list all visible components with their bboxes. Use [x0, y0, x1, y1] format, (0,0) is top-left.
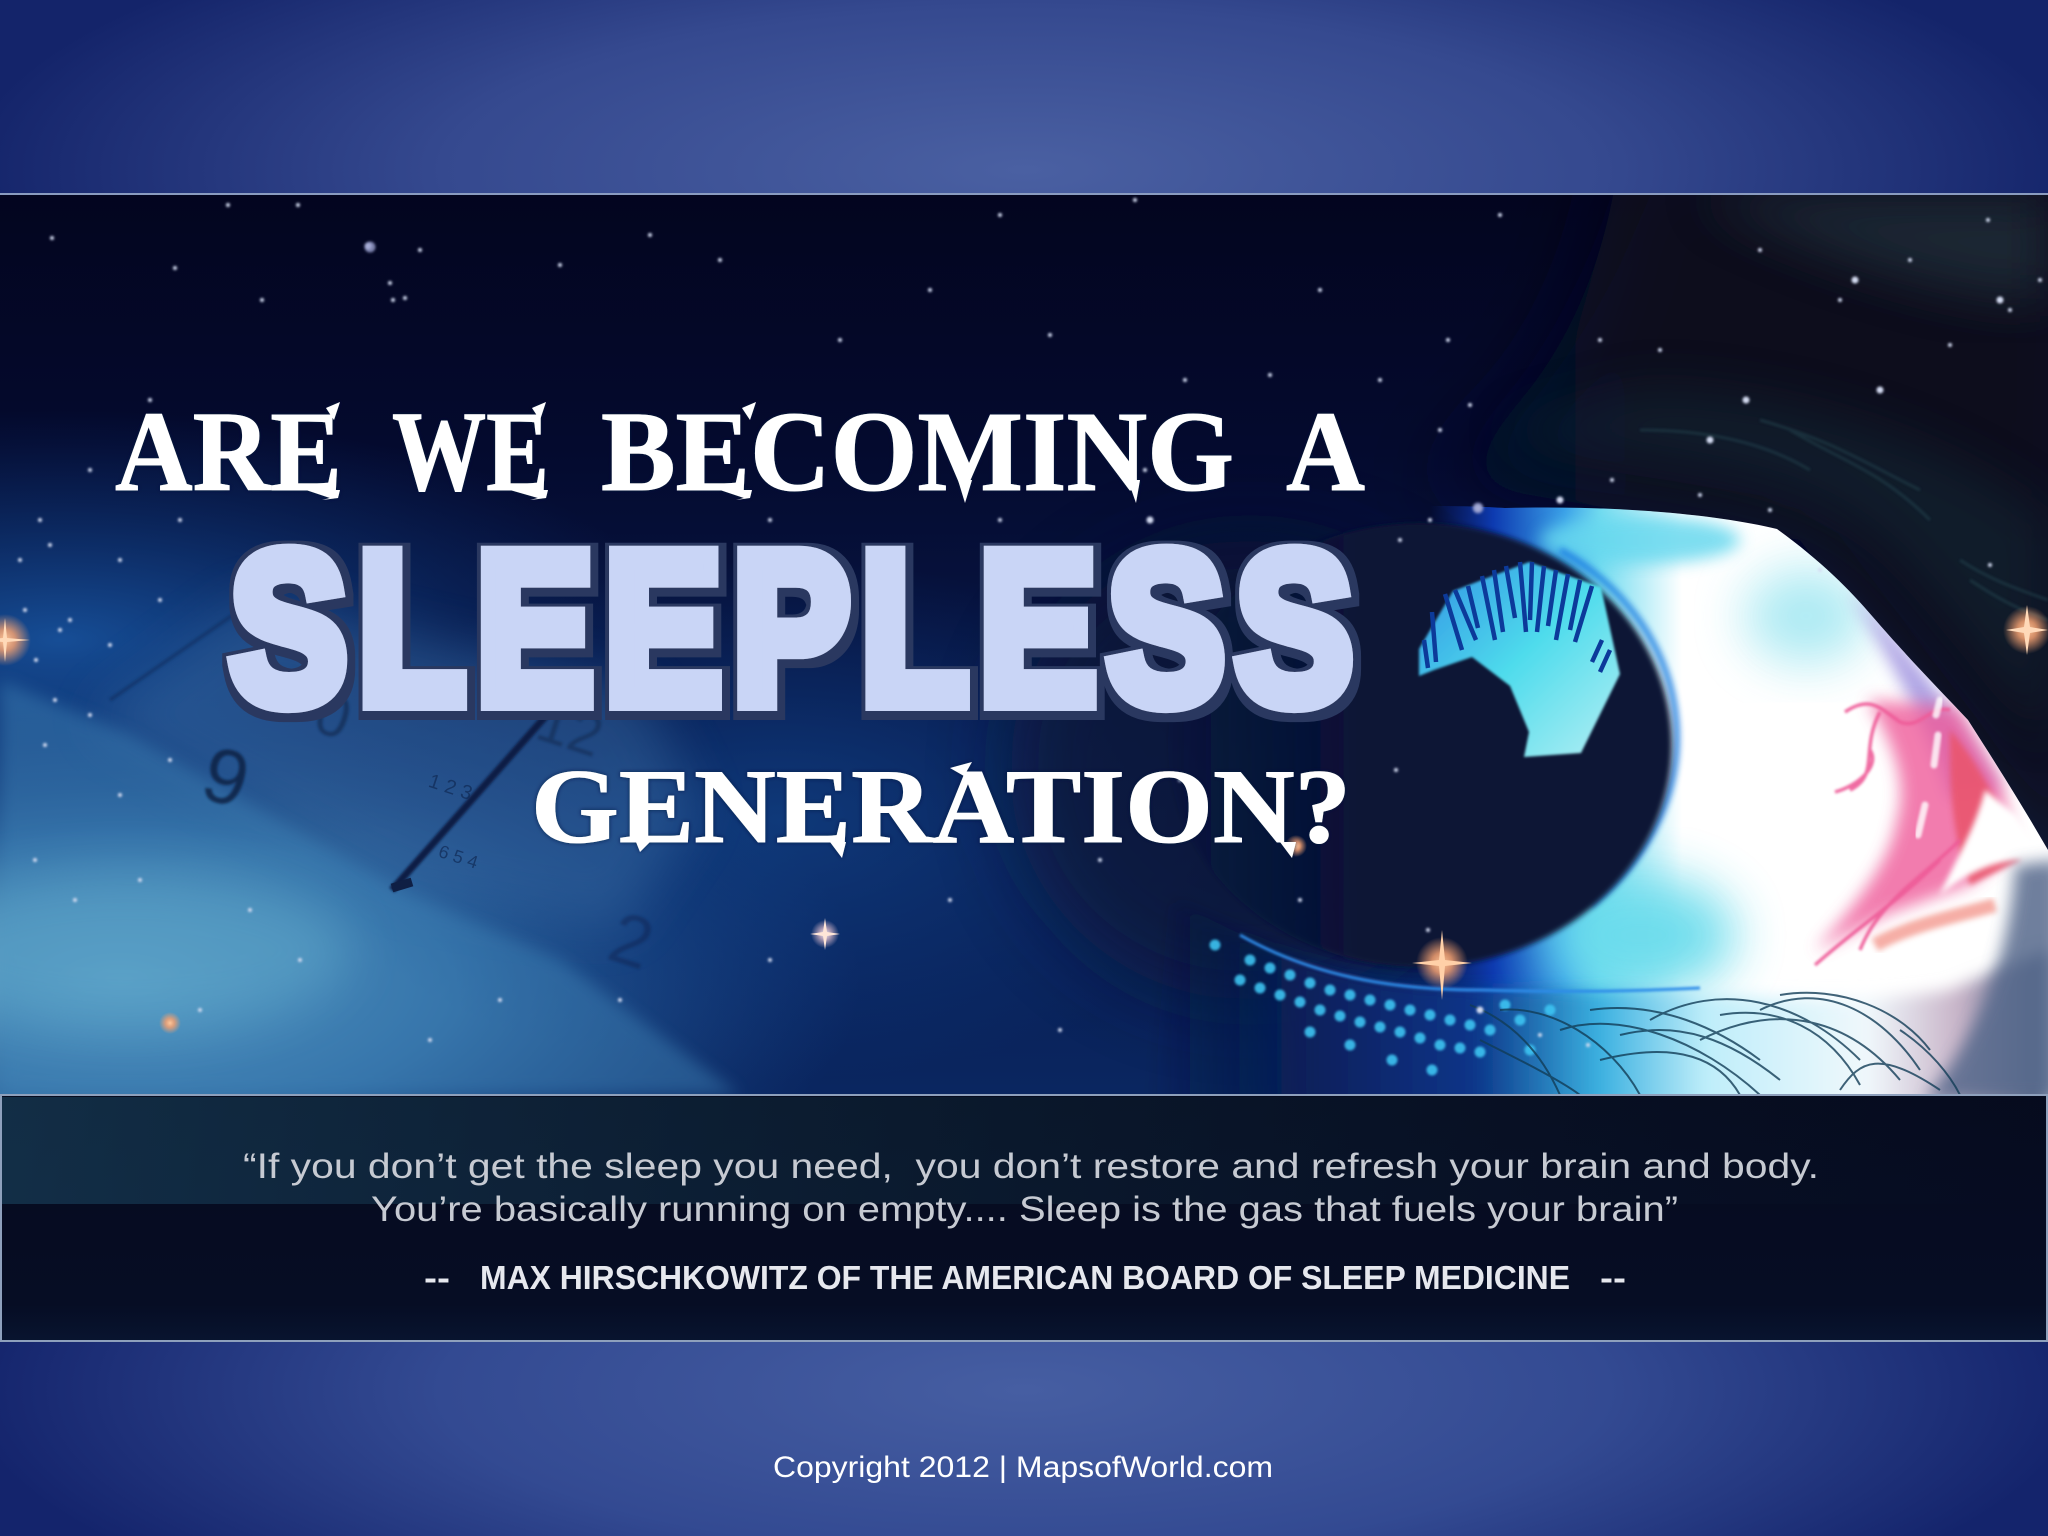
quote attribution: -- [424, 1259, 450, 1296]
eye: lower eyelid with lashes [1150, 860, 2048, 1110]
title line 1: are we becoming a [115, 388, 1365, 515]
title line 1: are we becoming a: BECOMING [601, 388, 1234, 515]
bottom background band [0, 1341, 2048, 1536]
title line 3: generation: GENERATION? [531, 748, 1351, 865]
eye: window reflection in pupil [1419, 562, 1620, 757]
clock face: 2 [600, 897, 663, 986]
star field [20, 200, 2040, 1045]
divider above hero image [0, 193, 2048, 195]
quote text: “If you don’t get the sleep you need, you don’t restore and refresh your brain and body. [243, 1147, 1819, 1186]
clock face: 12 [529, 688, 611, 770]
quote text: You’re basically running on empty.... Sleep is the gas that fuels your brain” [371, 1190, 1678, 1229]
upper eyelid, dark textured skin [1508, 195, 2048, 850]
eye: sclera [1434, 506, 2048, 1094]
title line 1: are we becoming a: WE [392, 388, 549, 515]
eye: iris [1168, 523, 1677, 967]
copyright: Copyright 2012 | MapsofWorld.com [773, 1451, 1273, 1484]
top background band [0, 0, 2048, 194]
title line 1: are we becoming a: ARE [115, 388, 342, 515]
clock face: 0 [307, 679, 359, 753]
clock face: 6 5 4 [436, 841, 480, 873]
clock face: 1 2 3 [426, 770, 475, 805]
pink blood vessels [1815, 700, 2040, 965]
title line 1: are we becoming a: A [1286, 388, 1365, 515]
clock face: 9 [193, 728, 259, 825]
panel: hero image of eye and night sky [0, 195, 2048, 1094]
quote attribution: MAX HIRSCHKOWITZ OF THE AMERICAN BOARD OF SLEEP MEDICINE [480, 1259, 1570, 1296]
clock face [0, 600, 740, 1095]
flare stars [0, 605, 2048, 1034]
title line 2: sleepless: SLEEPLESS [230, 509, 1364, 748]
quote text [243, 1147, 1819, 1229]
panel: quote bar [0, 1095, 2048, 1341]
quote attribution: -- [1600, 1259, 1626, 1296]
eye: dark shadow left of iris [985, 632, 1394, 1008]
